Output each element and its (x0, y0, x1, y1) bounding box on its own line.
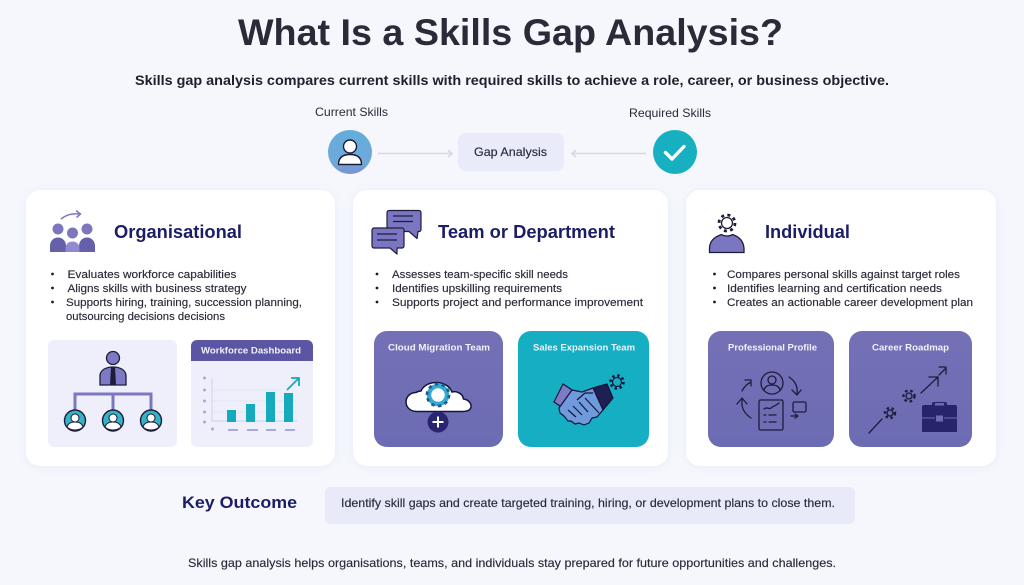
card title: Sales Expansion Team (533, 342, 635, 354)
icon: profile cycle (737, 372, 806, 430)
bar chart (203, 376, 299, 431)
icon: person with gear (710, 215, 744, 252)
career roadmap card (849, 331, 972, 447)
heading: organisational: Organisational (114, 222, 242, 242)
icon: cloud with gear (406, 382, 471, 432)
bullet list: individual: Creates an actionable career development plan (727, 297, 973, 309)
arrow: current to gap analysis (378, 150, 452, 157)
card title: Career Roadmap (872, 342, 949, 354)
card title: Cloud Migration Team (388, 342, 490, 354)
bullet list: team (376, 269, 643, 309)
bullet list: organisational: Aligns skills with business strategy (68, 283, 247, 295)
key outcome heading: Key Outcome (182, 493, 297, 512)
bullet list: team: Assesses team-specific skill needs (392, 269, 569, 281)
bullet list: organisational: Evaluates workforce capabilities (68, 269, 237, 281)
gap analysis box (458, 133, 564, 171)
icon: chat bubbles (372, 210, 421, 254)
icon: group of people (50, 210, 95, 252)
icon: current skills person (328, 130, 372, 174)
bullet list: individual (713, 269, 973, 309)
bullet list: team: Identifies upskilling requirements (392, 283, 563, 295)
icon: handshake (554, 376, 624, 425)
dashboard title: Workforce Dashboard (201, 346, 301, 356)
bullet list: individual: Identifies learning and certification needs (727, 283, 943, 295)
org chart card (48, 340, 177, 447)
card title: Professional Profile (728, 342, 817, 354)
panel: team or department (353, 190, 668, 466)
footer note: Skills gap analysis helps organisations, teams, and individuals stay prepared for future opportunities and challenges. (188, 556, 836, 570)
flow diagram: current to required skills (315, 105, 711, 174)
key outcome callout: Identify skill gaps and create targeted training, hiring, or development plans to close them. (341, 496, 835, 510)
arrow: required to gap analysis (572, 150, 646, 157)
sales expansion team card (518, 331, 649, 447)
subtitle: Skills gap analysis compares current skills with required skills to achieve a role, career, or business objective. (135, 72, 889, 88)
bullet list: team: Supports project and performance improvement (392, 297, 643, 309)
heading: team or department: Team or Department (438, 222, 615, 242)
bullet list: individual: Compares personal skills against target roles (727, 269, 961, 281)
professional profile card (708, 331, 834, 447)
panel: individual (686, 190, 996, 466)
icon: required skills check (653, 130, 697, 174)
label: current skills: Current Skills (315, 105, 388, 119)
bullet list: organisational: outsourcing decisions decisions (66, 311, 226, 323)
panel: organisational (26, 190, 335, 466)
icon: roadmap with gears and briefcase (869, 367, 957, 433)
bullet list: organisational: Supports hiring, training, succession planning, (66, 297, 302, 309)
workforce dashboard card (191, 340, 313, 447)
title: What Is a Skills Gap Analysis? (238, 12, 783, 53)
heading: individual: Individual (765, 222, 850, 242)
cloud migration team card (374, 331, 503, 447)
gap analysis box: Gap Analysis (474, 145, 547, 159)
key outcome callout (325, 487, 855, 524)
bullet list: organisational (51, 269, 302, 323)
label: required skills: Required Skills (629, 106, 711, 120)
